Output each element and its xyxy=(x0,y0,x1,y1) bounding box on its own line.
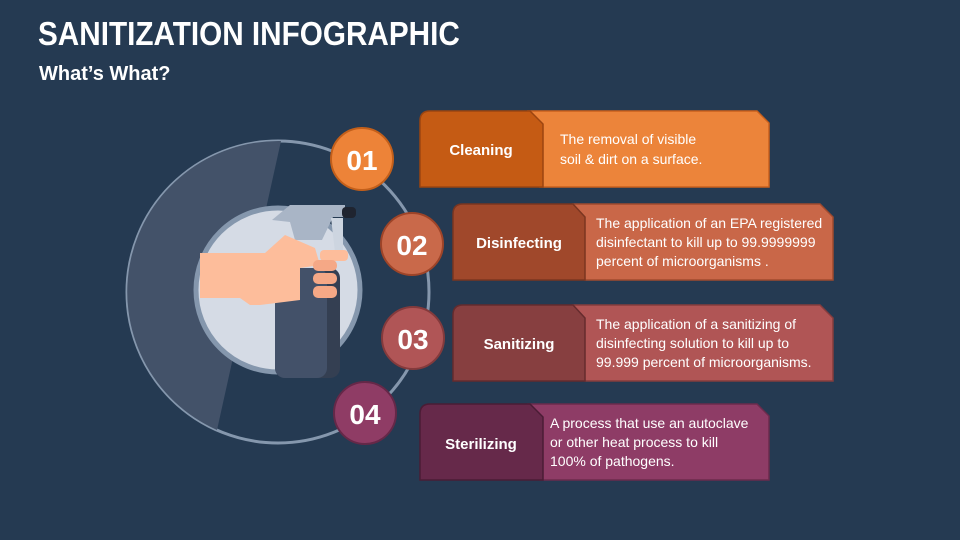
inner circle xyxy=(196,208,360,372)
number 02 xyxy=(381,213,443,275)
number 02: 02 xyxy=(396,230,428,261)
panel: disinfecting: percent of microorganisms . xyxy=(596,253,769,269)
icon: spray bottle with hand xyxy=(200,205,356,378)
panel: cleaning: Cleaning xyxy=(449,142,513,159)
panel: sterilizing xyxy=(420,404,769,480)
panel: disinfecting: The application of an EPA registered xyxy=(596,215,822,231)
panel: disinfecting xyxy=(453,204,833,280)
panel: sanitizing: disinfecting solution to kill up to xyxy=(596,335,789,351)
panel: cleaning: The removal of visible xyxy=(560,131,696,147)
number 03: 03 xyxy=(397,324,429,355)
subtitle: What’s What? xyxy=(39,63,170,85)
panel: sterilizing: Sterilizing xyxy=(445,436,517,453)
panel: disinfecting: Disinfecting xyxy=(476,235,562,252)
panel: sanitizing: 99.999 percent of microorganisms. xyxy=(596,354,812,370)
number 03 xyxy=(382,307,444,369)
title: SANITIZATION INFOGRAPHIC xyxy=(38,15,460,52)
panel: sterilizing: or other heat process to kill xyxy=(550,434,718,450)
panel: cleaning: soil & dirt on a surface. xyxy=(560,151,702,167)
panel: sterilizing: A process that use an autoclave xyxy=(550,415,749,431)
number 04: 04 xyxy=(349,399,381,430)
panel: sanitizing xyxy=(453,305,833,381)
number 01 xyxy=(331,128,393,190)
outer ring xyxy=(127,141,429,443)
panel: cleaning xyxy=(420,111,769,187)
panel: sanitizing: The application of a sanitizing of xyxy=(596,316,796,332)
panel: disinfecting: disinfectant to kill up to 99.9999999 xyxy=(596,234,816,250)
panel: sanitizing: Sanitizing xyxy=(484,336,554,353)
panel: sterilizing: 100% of pathogens. xyxy=(550,453,675,469)
number 01: 01 xyxy=(346,145,378,176)
number 04 xyxy=(334,382,396,444)
